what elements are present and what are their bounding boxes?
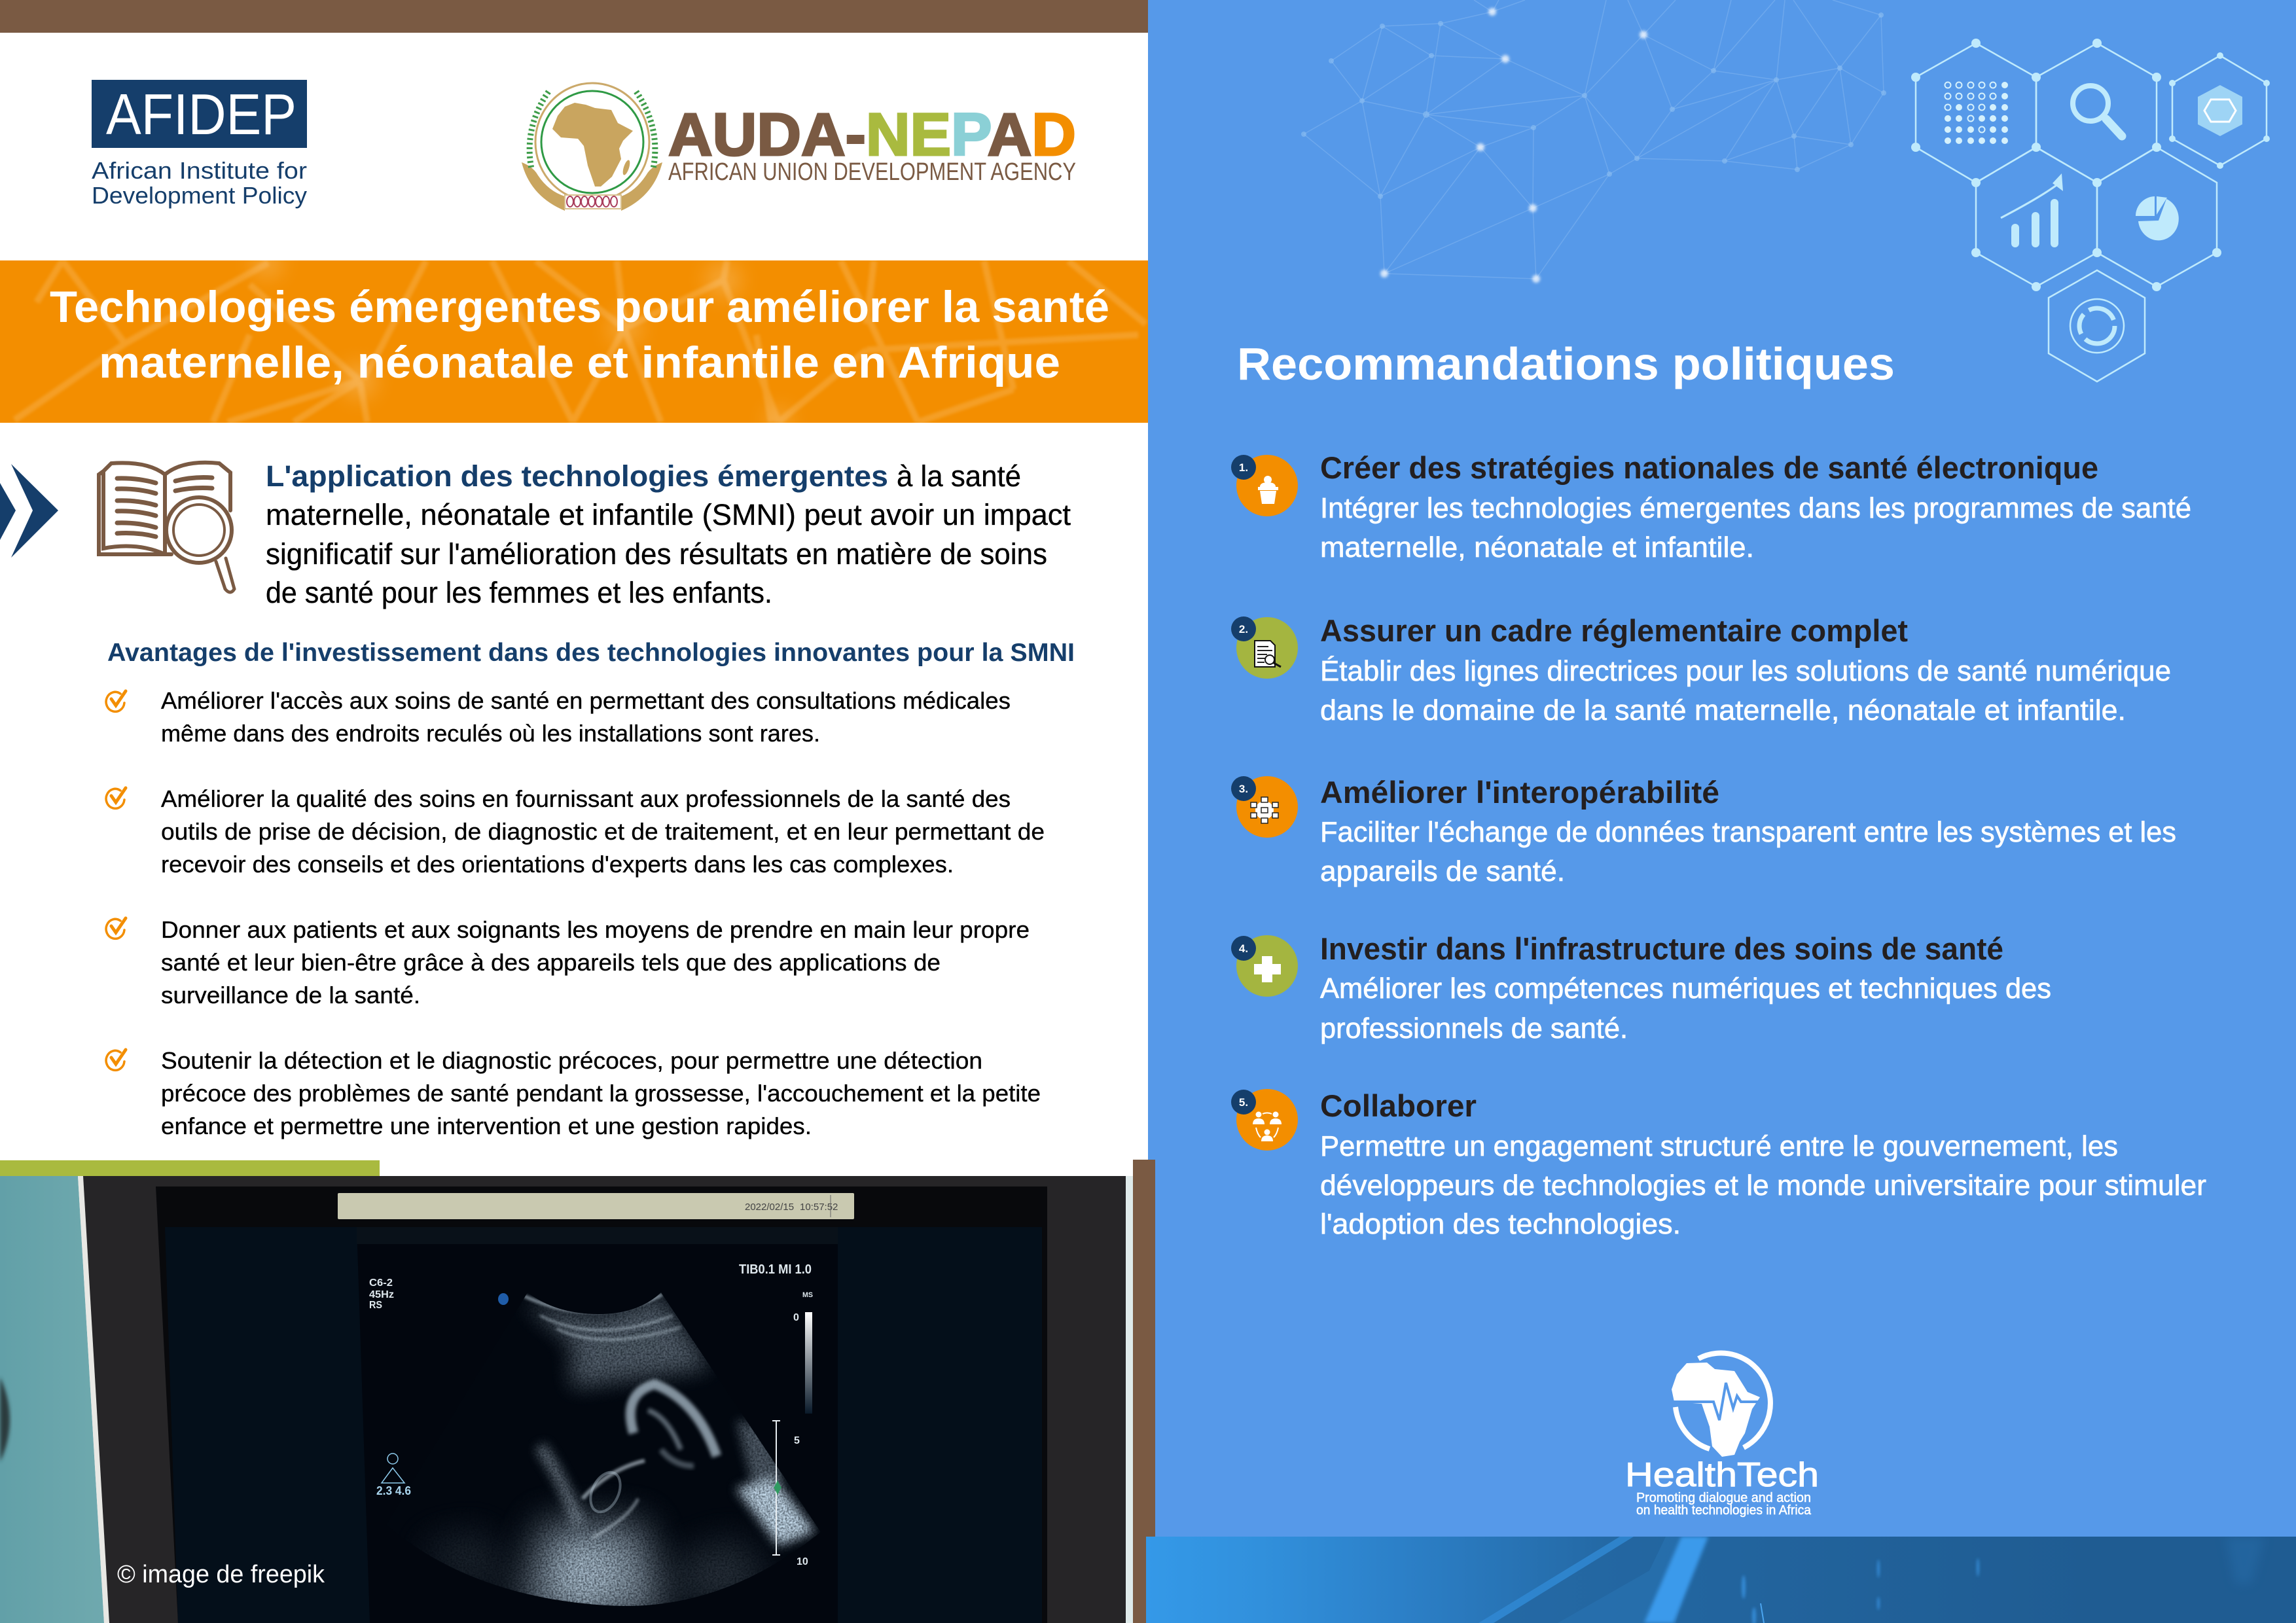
ultrasound overlay readouts: MS xyxy=(802,1291,813,1299)
recommendation 2: Établir des lignes directrices pour les solutions de santé numérique xyxy=(1320,655,2171,687)
heading: avantages: Avantages de l'investissement dans des technologies innovantes pour la SMNI xyxy=(107,639,1075,667)
text block: introduction: de santé pour les femmes et les enfants. xyxy=(266,576,772,609)
title: Technologies émergentes pour améliorer la santé xyxy=(50,282,1109,332)
text block: introduction: L'application des technologies émergentes xyxy=(266,459,888,493)
bullet 1: Améliorer l'accès aux soins de santé en permettant des consultations médicales xyxy=(161,687,1011,714)
logo: HealthTech xyxy=(1625,1353,1819,1518)
recommendation 5: Collaborer xyxy=(1320,1088,1477,1123)
recommendation 5 xyxy=(1231,1088,2206,1240)
icon: magnifying glass xyxy=(2073,86,2122,136)
icon: connected cubes xyxy=(1231,776,1298,838)
logo: HealthTech: on health technologies in Africa xyxy=(1636,1503,1812,1518)
ultrasound depth scale xyxy=(498,1293,812,1555)
recommendation 1: maternelle, néonatale et infantile. xyxy=(1320,531,1754,563)
icon: pie chart xyxy=(2136,196,2179,240)
bullet 1: même dans des endroits reculés où les installations sont rares. xyxy=(161,720,820,747)
bullet 2: outils de prise de décision, de diagnostic et de traitement, et en leur permettant de xyxy=(161,818,1045,845)
bullet 1 xyxy=(106,687,1011,747)
bullet 4: Soutenir la détection et le diagnostic précoces, pour permettre une détection xyxy=(161,1047,982,1074)
logo: AFIDEP: African Institute for xyxy=(92,157,307,184)
icon: three people xyxy=(1231,1089,1298,1150)
icon: African Union emblem xyxy=(522,83,662,211)
icon: hexagon badge xyxy=(2198,85,2242,136)
ultrasound overlay readouts xyxy=(369,1262,813,1567)
ultrasound power icon xyxy=(382,1454,404,1483)
recommendation 4: Investir dans l'infrastructure des soins de santé xyxy=(1320,931,2003,966)
ultrasound overlay readouts: 0 xyxy=(793,1312,799,1323)
green accent bar xyxy=(0,1160,380,1176)
bullet 4: précoce des problèmes de santé pendant la grossesse, l'accouchement et la petite xyxy=(161,1080,1041,1107)
recommendation 4: Améliorer les compétences numériques et techniques des xyxy=(1320,972,2051,1005)
recommendation 5: l'adoption des technologies. xyxy=(1320,1208,1681,1240)
top brown bar xyxy=(0,0,1148,33)
recommendation 5: développeurs de technologies et le monde universitaire pour stimuler xyxy=(1320,1169,2206,1202)
icon: document and magnifier xyxy=(1231,616,1298,679)
ultrasound overlay readouts: RS xyxy=(369,1300,382,1311)
icon: book and magnifying glass xyxy=(99,463,234,592)
recommendation 3 xyxy=(1231,775,2176,887)
recommendation 1: Intégrer les technologies émergentes dans les programmes de santé xyxy=(1320,492,2191,524)
recommendation 2 xyxy=(1231,613,2171,726)
title: maternelle, néonatale et infantile en Afrique xyxy=(99,338,1060,387)
logo: AFIDEP: Development Policy xyxy=(92,182,307,209)
ultrasound overlay readouts: 45Hz xyxy=(369,1289,394,1300)
recommendation 1 xyxy=(1231,450,2191,563)
recommendation 2: dans le domaine de la santé maternelle, néonatale et infantile. xyxy=(1320,694,2126,726)
icon: podium xyxy=(1231,455,1298,516)
panel: left white background xyxy=(0,0,1148,1623)
icon: medical cross: 4. xyxy=(1239,942,1248,955)
icon: connected cubes: 3. xyxy=(1239,783,1248,795)
logo: AUDA-NEPAD: AFRICAN UNION DEVELOPMENT AGENCY xyxy=(668,158,1076,186)
title xyxy=(50,282,1109,387)
bullet 2: recevoir des conseils et des orientations d'experts dans les cas complexes. xyxy=(161,851,954,878)
icon: circular ring xyxy=(2070,299,2124,353)
icon: three people: 5. xyxy=(1239,1096,1248,1109)
ultrasound overlay readouts: 10 xyxy=(797,1556,808,1567)
ultrasound overlay readouts: TIB0.1 MI 1.0 xyxy=(739,1262,812,1277)
recommendation 1: Créer des stratégies nationales de santé électronique xyxy=(1320,450,2098,485)
bullet 3 xyxy=(106,916,1030,1008)
graphic: hexagon technology icons xyxy=(1911,39,2270,382)
text block: introduction xyxy=(266,459,1071,609)
ultrasound overlay readouts: 2.3 4.6 xyxy=(376,1484,411,1497)
bullet list: avantages xyxy=(106,687,1045,1139)
recommendation 4: professionnels de santé. xyxy=(1320,1012,1628,1044)
recommendation 3: appareils de santé. xyxy=(1320,855,1565,887)
ultrasound overlay readouts: 5 xyxy=(794,1435,800,1446)
bullet 3: santé et leur bien-être grâce à des appareils tels que des applications de xyxy=(161,949,941,976)
photo credit: © image de freepik xyxy=(117,1561,325,1588)
recommendation 3: Améliorer l'interopérabilité xyxy=(1320,775,1719,810)
logo: AUDA-NEPAD: AUDA-NEPAD xyxy=(668,101,1076,168)
icon: dot grid xyxy=(1945,82,2008,144)
bottom blue strip xyxy=(1146,1537,2296,1623)
background network pattern xyxy=(1301,0,1886,283)
recommendation 3: Faciliter l'échange de données transparent entre les systèmes et les xyxy=(1320,816,2176,848)
bullet 4 xyxy=(106,1047,1041,1139)
bullet 3: Donner aux patients et aux soignants les moyens de prendre en main leur propre xyxy=(161,916,1030,943)
icon: document and magnifier: 2. xyxy=(1239,623,1248,635)
monitor top label bar xyxy=(338,1193,854,1219)
heading: recommandations politiques: Recommandations politiques xyxy=(1237,338,1895,389)
panel: orange title banner xyxy=(0,260,1148,423)
icon: double chevron xyxy=(0,464,58,558)
bullet 2: Améliorer la qualité des soins en fournissant aux professionnels de la santé des xyxy=(161,785,1011,812)
recommendation 5: Permettre un engagement structuré entre le gouvernement, les xyxy=(1320,1130,2118,1162)
monitor top label bar: 10:57:52 xyxy=(800,1202,838,1213)
logo: HealthTech: Promoting dialogue and action xyxy=(1636,1491,1811,1505)
bullet 4: enfance et permettre une intervention et une gestion rapides. xyxy=(161,1113,812,1139)
bullet 2 xyxy=(106,785,1045,878)
recommendation 2: Assurer un cadre réglementaire complet xyxy=(1320,613,1908,648)
logo: AUDA-NEPAD xyxy=(522,83,1076,211)
recommendation 4 xyxy=(1231,931,2051,1044)
logo: AFIDEP: AFIDEP xyxy=(106,82,296,147)
text block: introduction: à la santé xyxy=(897,459,1021,493)
text block: introduction: maternelle, néonatale et infantile (SMNI) peut avoir un impact xyxy=(266,498,1071,531)
logo: AFIDEP xyxy=(92,80,307,209)
logo: HealthTech: HealthTech xyxy=(1625,1456,1819,1494)
ultrasound scan xyxy=(423,1293,820,1606)
text block: introduction: significatif sur l'amélioration des résultats en matière de soins xyxy=(266,537,1047,571)
icon: Africa with heartbeat xyxy=(1672,1353,1770,1457)
monitor top label bar: 2022/02/15 xyxy=(745,1202,794,1213)
icon: medical cross xyxy=(1231,935,1298,997)
photo: ultrasound monitor xyxy=(0,1176,1134,1623)
bullet 3: surveillance de la santé. xyxy=(161,982,420,1008)
ultrasound overlay readouts: C6-2 xyxy=(369,1277,393,1289)
brown vertical bar xyxy=(1133,1160,1155,1623)
panel: right blue background xyxy=(1148,0,2296,1623)
icon: rising bar chart xyxy=(2001,173,2063,247)
icon: podium: 1. xyxy=(1239,461,1248,474)
